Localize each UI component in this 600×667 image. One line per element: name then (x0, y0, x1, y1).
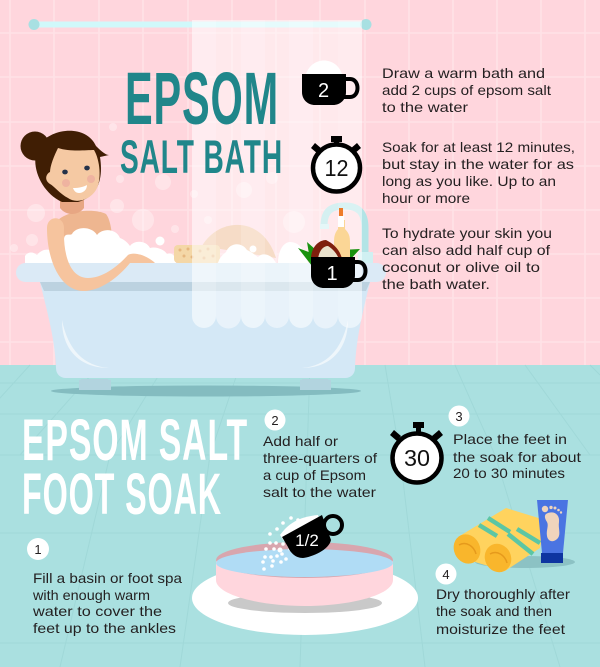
foot soak step 2: Add half or (263, 433, 338, 449)
shower curtain rod (28, 19, 372, 30)
foot soak step 4 (436, 564, 570, 637)
title: Epsom Salt Bath: EPSOM (125, 57, 279, 140)
foot soak step 1: with enough warm (32, 587, 150, 603)
foot soak step 4: 4 (442, 567, 450, 582)
foam right (218, 242, 308, 263)
highlights (62, 320, 109, 368)
rim (216, 542, 393, 578)
water (216, 549, 393, 577)
background: teal tiled floor (0, 365, 600, 667)
foot soak step 4: the soak and then (436, 603, 552, 619)
rim (16, 263, 386, 282)
icon: stopwatch 12 minutes: 12 (324, 155, 348, 181)
rim shadow (40, 282, 370, 291)
hair bun (20, 132, 50, 160)
foot soak step 4: Dry thoroughly after (436, 586, 570, 602)
text: bath step 1: add 2 cups of epsom salt (382, 82, 551, 98)
neck (60, 190, 84, 214)
plate (192, 561, 418, 635)
icon: coconut and oil bottle with cup (298, 208, 366, 288)
arm over the rim (47, 218, 155, 291)
icon: salt pouring (261, 516, 300, 571)
illustration: foot basin (192, 542, 418, 635)
text: bath step 3: can also add half cup of (382, 242, 550, 258)
basin body (216, 560, 393, 606)
faucet (320, 206, 373, 264)
bottle (334, 220, 350, 262)
tub feet (79, 379, 111, 390)
text: bath step 1: Draw a warm bath and (382, 65, 545, 81)
tub body (40, 282, 370, 378)
text: bath step 3: the bath water. (382, 276, 490, 292)
illustration: towels and foot cream (449, 500, 575, 577)
foot mark (545, 512, 559, 541)
icon: coconut and oil bottle with cup: 1 (326, 263, 338, 285)
foot soak step 2: a cup of Epsom (263, 467, 366, 483)
torso (56, 211, 112, 262)
foot soak step 2: 2 (271, 413, 279, 428)
sponge (174, 245, 220, 263)
towel rolls (458, 508, 545, 571)
foot soak step 3 (448, 406, 581, 481)
background: pink tiled wall (0, 0, 600, 366)
icon: tilted half cup (280, 515, 342, 558)
icon: stopwatch 12 minutes (311, 136, 361, 192)
foot soak step 3: the soak for about (453, 449, 581, 465)
foot soak step 1: water to cover the (32, 603, 162, 619)
foam (25, 228, 176, 263)
foot soak step 1: Fill a basin or foot spa (33, 570, 182, 586)
text: bath step 3: coconut or olive oil to (382, 259, 540, 275)
knee (202, 225, 276, 258)
foot soak step 3: 20 to 30 minutes (453, 465, 565, 481)
text: bath step 2: hour or more (382, 190, 470, 206)
woman in the bath (20, 131, 308, 263)
text: bath step 1 (382, 65, 551, 115)
text: bath step 2: long as you like. Up to an (382, 173, 556, 189)
tube (537, 500, 568, 553)
foot soak step 1 (27, 538, 182, 636)
icon: cup with 2 cups of salt (302, 60, 358, 105)
text: bath step 1: to the water (382, 99, 468, 115)
text: bath step 2 (382, 139, 575, 206)
text: bath step 2: Soak for at least 12 minutes, (382, 139, 575, 155)
title: Epsom Salt Foot Soak: FOOT SOAK (22, 462, 222, 527)
hair back (35, 131, 109, 202)
eyes (62, 170, 68, 174)
title: Epsom Salt Foot Soak: EPSOM SALT (22, 408, 248, 473)
foot soak step 2: three-quarters of (263, 450, 377, 466)
text: bath step 3 (382, 225, 552, 292)
cup (311, 257, 355, 288)
floor shadow (51, 386, 361, 396)
title: Epsom Salt Bath (120, 57, 283, 183)
foot soak step 1: 1 (34, 542, 42, 557)
foot soak step 2: salt to the water (263, 484, 376, 500)
icon: cup with 2 cups of salt: 2 (318, 80, 329, 102)
leaves (298, 242, 360, 266)
face (46, 148, 100, 201)
bath bubbles in the air (10, 123, 305, 252)
bathtub (16, 218, 386, 396)
foot soak step 4: moisturize the feet (436, 621, 565, 637)
foot soak step 1: feet up to the ankles (33, 620, 176, 636)
foot soak step 3: Place the feet in (453, 431, 567, 447)
icon: stopwatch 30 minutes (390, 422, 443, 482)
icon: tilted half cup: 1/2 (295, 531, 319, 550)
icon: stopwatch 30 minutes: 30 (404, 445, 430, 471)
cheeks (62, 179, 70, 187)
smile (73, 185, 87, 193)
shower curtain (192, 20, 362, 328)
basin shadow (228, 593, 382, 613)
title: Epsom Salt Bath: SALT BATH (120, 130, 283, 183)
title: Epsom Salt Foot Soak (22, 408, 248, 527)
foot soak step 3: 3 (455, 409, 463, 424)
shadow (475, 556, 575, 568)
coconut (311, 240, 342, 259)
text: bath step 3: To hydrate your skin you (382, 225, 552, 241)
foot soak step 2 (263, 410, 377, 500)
text: bath step 2: but stay in the water for as (382, 156, 574, 172)
